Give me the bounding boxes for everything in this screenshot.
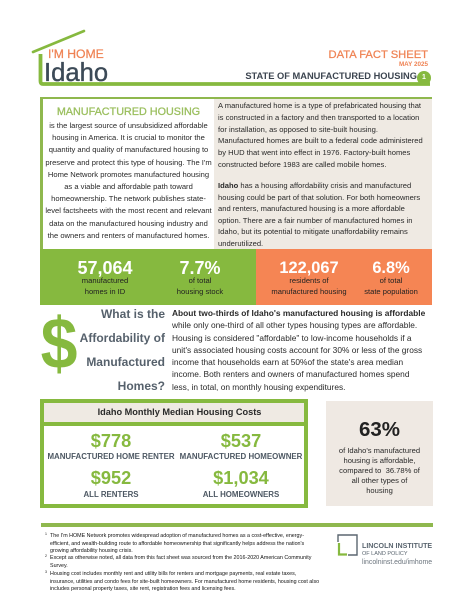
badge: footnote 1: 1: [422, 74, 426, 81]
logo text: LINCOLN INSTITUTE: [362, 542, 432, 550]
footnote 1: [45, 532, 304, 554]
heading bar: Idaho Monthly Median Housing Costs: [98, 407, 261, 417]
stat: 7.7%: of total: [189, 276, 211, 285]
stat: 7.7%: housing stock: [177, 287, 223, 296]
cost: all renters: $952: [91, 468, 131, 488]
label: date: MAY 2025: [399, 61, 428, 68]
footnote 1: growing affordability housing crisis.: [50, 548, 133, 554]
cost: all homeowners: $1,034: [213, 468, 269, 488]
text block: definition: by HUD that went into effect in 1976. Factory-built homes: [218, 148, 410, 157]
stat: 6.8%: 6.8%: [372, 258, 410, 276]
text block: affordability explanation: less, in total, on monthly housing expenditures.: [172, 382, 345, 392]
text block: affordability explanation: Housing is considered "affordable" to low-income households if a: [172, 333, 412, 343]
heading: what is the affordability: Affordability of: [80, 331, 165, 345]
stat: 6.8%: state population: [364, 287, 418, 296]
cost: all homeowners: [203, 468, 279, 499]
text block: affordability explanation: while only one-third of all other types housing types are affordable.: [172, 320, 417, 330]
logo: Lincoln Institute of Land Policy: [337, 534, 432, 556]
icon: dollar sign: $: [41, 304, 77, 384]
stat: 57,064 homes: homes in ID: [85, 287, 125, 296]
footnote 2: Except as otherwise noted, all data from this fact sheet was sourced from the 2016-2020 American Community: [50, 555, 311, 561]
subtitle: STATE OF MANUFACTURED HOUSING: [245, 71, 417, 81]
icon: logo square: [337, 534, 358, 556]
text block: as a viable and affordable path toward: [64, 182, 193, 191]
text block: Idaho context: housing could be part of that solution. For both homeowners: [218, 193, 420, 202]
footnote 3: Housing cost includes monthly rent and utility bills for renters and mortgage payments, real estate taxes,: [50, 571, 296, 577]
cost: manufactured homeowner: [180, 431, 302, 461]
footnote 3: includes personal property taxes, site rent, registration fees and licensing fees.: [50, 586, 236, 592]
text block: housing is affordable,: [343, 456, 416, 465]
heading: what is the affordability: [80, 307, 166, 393]
cost: all renters: ALL RENTERS: [83, 490, 139, 499]
text block: Idaho context: option. There are a fair number of manufactured homes in: [218, 216, 412, 225]
heading: MANUFACTURED HOUSING: [57, 106, 200, 118]
text block: compared to 36.78% of: [339, 466, 420, 475]
text block: definition: is constructed in a factory and then transported to a location: [218, 113, 419, 122]
panel: manufactured housing intro: [40, 97, 214, 249]
cost: manufactured homeowner: $537: [221, 431, 261, 451]
decorative rule: footer: [41, 523, 433, 527]
footnotes: 1: [45, 532, 47, 536]
stat: 122,067: manufactured housing: [271, 287, 347, 296]
text block: affordability explanation: [172, 308, 425, 392]
divider: [44, 422, 304, 426]
icon: house roof and floor outline: [32, 30, 430, 86]
cost: manufactured home renter: MANUFACTURED HOME RENTER: [47, 452, 175, 461]
text block: [45, 121, 212, 240]
footnote 3: [45, 570, 319, 592]
text block: all other types of: [352, 476, 407, 485]
title: I'M HOME: I'M HOME: [48, 47, 104, 61]
footnote 1: The I'm HOME Network promotes widespread adoption of manufactured homes as a cost-effective, energy-: [50, 533, 304, 539]
text block: preserve and protect this type of housing. The I'm: [45, 158, 212, 167]
stat: 57,064 homes: [77, 258, 133, 296]
text block: affordability explanation: unit's associated housing costs account for 30% or less of the gross: [172, 345, 422, 355]
heading: what is the affordability: Homes?: [118, 379, 165, 393]
logo subtext: OF LAND POLICY: [362, 550, 408, 556]
text block: homeownership. The network publishes state-: [51, 194, 206, 203]
text block: affordability explanation: income that households earn at 50%of the state's area median: [172, 357, 403, 367]
stat: 7.7%: [177, 258, 224, 296]
stat: 57,064 homes: manufactured: [82, 276, 128, 285]
text block: of Idaho's manufactured: [339, 446, 420, 455]
footnotes: 3: [45, 570, 47, 574]
footnote 2: Survey.: [50, 563, 68, 569]
text block: affordability explanation: income. Both renters and owners of manufactured homes spend: [172, 369, 409, 379]
stat: 122,067: residents of: [289, 276, 329, 285]
stat: 63%: 63%: [359, 418, 400, 441]
text block: data on the manufactured housing industry and: [49, 219, 208, 228]
label: data fact sheet: DATA FACT SHEET: [329, 49, 428, 61]
cost: manufactured home renter: [47, 431, 175, 461]
cost: all renters: [83, 468, 139, 499]
text block: Home Network promotes manufactured housing: [48, 170, 209, 179]
text block: quantity and quality of manufactured housing to: [49, 145, 208, 154]
panel: monthly median housing costs: [40, 399, 308, 508]
stat: 57,064 homes: 57,064: [77, 258, 133, 278]
text block: Idaho context: Idaho, but its potential to mitigate unaffordability remains: [218, 227, 408, 236]
text block: definition: constructed before 1983 are called mobile homes.: [218, 160, 386, 169]
footnotes: 2: [45, 554, 47, 558]
heading: what is the affordability: Manufactured: [86, 355, 165, 369]
stat: 122,067: 122,067: [279, 258, 339, 276]
footnote 1: efficient, and wealth-building route to affordable homeownership that significantly helps address the nation's: [50, 541, 304, 547]
text block: definition: Manufactured homes are built to a federal code administered: [218, 136, 423, 145]
panel: definition and Idaho context: [214, 97, 432, 249]
text block: Idaho context: underutilized.: [218, 239, 263, 248]
text block: Idaho context: and renters, manufactured housing is a more affordable: [218, 204, 405, 213]
header: [32, 30, 431, 87]
stat: 7.7%: 7.7%: [179, 258, 221, 278]
stat: 122,067: [271, 258, 347, 296]
footnote 3: insurance, utilities and condo fees for site-built homeowners. For manufactured home residents, housing cost also: [50, 579, 319, 585]
stat: 6.8%: [364, 258, 418, 296]
heading bar: [44, 403, 304, 422]
link: lincolninst.edu/imhome: lincolninst.edu/imhome: [362, 559, 432, 566]
text block: Idaho context: Idaho has a housing affordability crisis and manufactured: [218, 181, 411, 190]
text block: definition: A manufactured home is a type of prefabricated housing that: [218, 101, 421, 110]
text block: level factsheets with the most recent and relevant: [45, 206, 212, 215]
heading: what is the affordability: What is the: [101, 307, 165, 321]
cost: manufactured homeowner: MANUFACTURED HOMEOWNER: [180, 452, 302, 461]
text block: Idaho context: [218, 181, 420, 248]
text block: definition: [218, 101, 423, 169]
text block: housing: [366, 486, 393, 495]
panel: 63% callout: [326, 401, 433, 506]
stat: 6.8%: of total: [380, 276, 402, 285]
text block: the owners and renters of manufactured homes.: [48, 231, 209, 240]
text block: housing in America. It is crucial to monitor the: [52, 133, 205, 142]
text block: is the largest source of unsubsidized affordable: [49, 121, 208, 130]
text block: definition: for installation, as opposed to site-built housing.: [218, 125, 378, 134]
cost: all homeowners: ALL HOMEOWNERS: [203, 490, 279, 499]
footnotes: [45, 532, 319, 592]
badge: footnote 1: [417, 71, 431, 85]
footnote 2: [45, 554, 312, 569]
text block: [339, 446, 420, 495]
title: Idaho: Idaho: [44, 59, 108, 87]
cost: manufactured home renter: $778: [91, 431, 131, 451]
panel: green stats band: [40, 249, 256, 305]
panel: orange stats band: [256, 249, 432, 305]
text block: affordability explanation: About two-thirds of Idaho's manufactured housing is affordable: [172, 308, 425, 318]
